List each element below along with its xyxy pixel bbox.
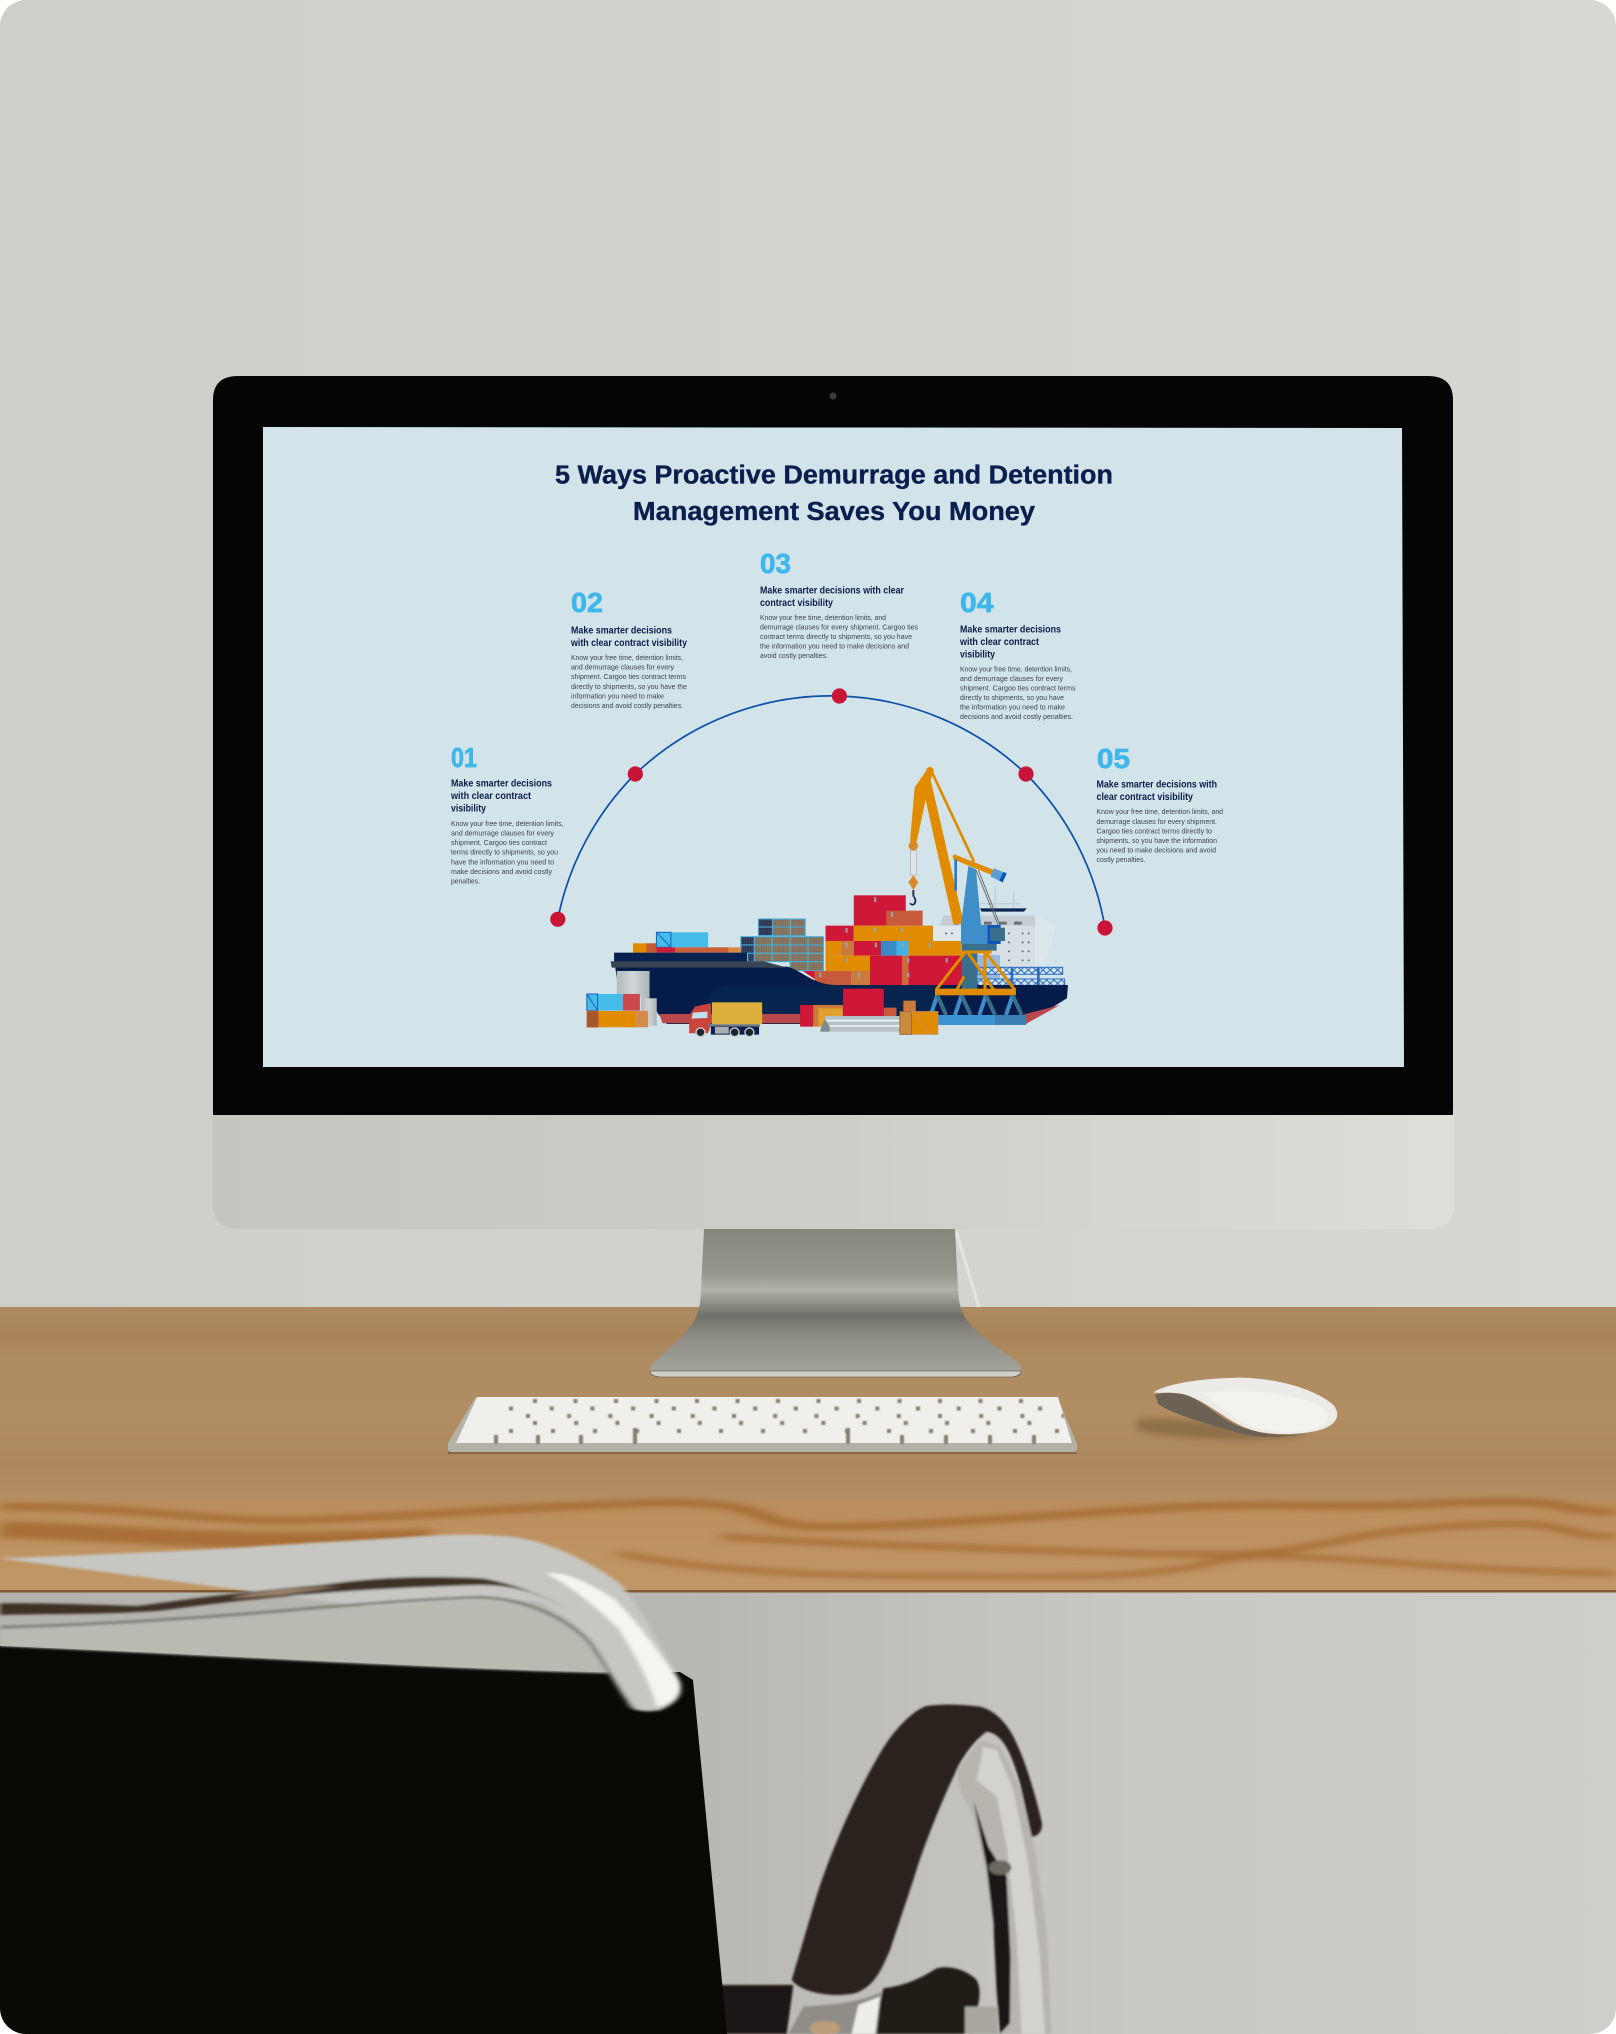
container stack <box>803 895 962 985</box>
text block 04: Know your free time, detention limits, <box>960 666 1072 674</box>
text block 05: costly penalties. <box>1096 856 1146 864</box>
ground cargo and truck <box>587 971 938 1037</box>
keyboard shadow <box>448 1451 1077 1454</box>
tube body <box>0 1535 681 1711</box>
text block 01: Know your free time, detention limits, <box>451 820 563 828</box>
text block 05: Know your free time, detention limits, and <box>1096 808 1223 816</box>
text block 04: and demurrage clauses for every <box>960 675 1063 683</box>
text block 02: with clear contract visibility <box>570 638 687 649</box>
text block 01: terms directly to shipments, so you <box>451 849 558 857</box>
tube dark reflection <box>0 1577 565 1615</box>
left deck containers <box>633 932 741 953</box>
black bezel <box>213 376 1453 1115</box>
text block 05: you need to make decisions and avoid <box>1096 846 1216 854</box>
text block 05: 05 <box>1097 743 1130 774</box>
keyboard base <box>448 1398 1077 1452</box>
tube tan reflection <box>230 1587 340 1598</box>
text block 05: clear contract visibility <box>1096 792 1193 803</box>
text block 04: Make smarter decisions <box>960 624 1061 636</box>
webcam <box>830 392 836 400</box>
hub wedge <box>873 1967 980 2034</box>
text block 05: shipments, so you have the information <box>1096 837 1217 845</box>
arc markers <box>550 688 1113 936</box>
text block 03: Make smarter decisions with clear <box>760 586 904 596</box>
monitor stand <box>650 1229 1022 1377</box>
arc timeline <box>558 696 1105 928</box>
text block 05 <box>1096 743 1223 864</box>
text block 04: visibility <box>960 650 995 660</box>
title <box>555 462 1113 526</box>
text block 02: shipment. Cargoo ties contract terms <box>571 673 686 681</box>
mouse highlight <box>1202 1391 1328 1432</box>
text block 02: 02 <box>571 587 603 618</box>
title: 5 Ways Proactive Demurrage and Detention <box>555 462 1113 490</box>
keyboard <box>448 1397 1077 1454</box>
icon: truck <box>689 1002 762 1037</box>
text block 02 <box>570 587 687 710</box>
text block 01: have the information you need to <box>451 858 554 866</box>
text block 04 <box>959 587 1076 721</box>
gantry frame <box>929 952 1026 1025</box>
text block 05: Make smarter decisions with <box>1096 780 1217 790</box>
center cargo <box>800 989 938 1034</box>
text block 02: information you need to make <box>571 692 664 700</box>
screen background <box>263 427 1404 1067</box>
axle <box>965 2007 998 2034</box>
lower dark support <box>713 1985 793 2034</box>
crane <box>908 767 1026 1025</box>
text block 03: avoid costly penalties. <box>760 652 828 660</box>
chrome frame <box>0 1535 681 1711</box>
icon: power cable <box>956 1231 979 1307</box>
text block 02: directly to shipments, so you have the <box>571 683 687 691</box>
keys <box>456 1397 1072 1443</box>
ship hull <box>611 953 1068 1024</box>
screen panel <box>263 427 1404 1067</box>
text block 01: visibility <box>451 804 486 814</box>
wooden desk <box>0 1307 1616 1592</box>
text block 03: 03 <box>760 548 791 579</box>
text block 01: shipment. Cargoo ties contract <box>451 839 547 847</box>
text block 02: decisions and avoid costly penalties. <box>571 702 683 710</box>
rubber tyre <box>792 1705 1042 1995</box>
chrome rim <box>957 1740 1052 2034</box>
chrome post <box>788 1992 882 2034</box>
background: wall <box>0 0 1616 1320</box>
bolt <box>989 1860 1011 1875</box>
inner space below tube <box>0 1598 608 1673</box>
background: lower wall <box>0 1585 1616 2034</box>
stand body <box>650 1229 1022 1374</box>
text block 04: decisions and avoid costly penalties. <box>960 713 1073 721</box>
office chair <box>0 1535 1052 2034</box>
illustration: cargo ship and crane <box>587 767 1068 1037</box>
text block 01: penalties. <box>451 877 480 885</box>
mesh containers <box>741 919 823 971</box>
text block 01: and demurrage clauses for every <box>451 830 554 838</box>
title: Management Saves You Money <box>633 498 1036 526</box>
ship superstructure <box>933 887 1065 986</box>
text block 03: contract visibility <box>760 598 833 609</box>
stand foot edge <box>650 1371 1021 1377</box>
text block 01: make decisions and avoid costly <box>451 868 552 876</box>
text block 02: Make smarter decisions <box>571 626 672 636</box>
mouse underside <box>1155 1392 1307 1437</box>
tube thin line <box>0 1597 634 1708</box>
tube highlight <box>546 1573 680 1707</box>
text block 04: shipment. Cargoo ties contract terms <box>960 684 1076 692</box>
key gaps <box>496 1401 1070 1444</box>
text block 01: 01 <box>451 742 477 773</box>
left cargo pile <box>587 971 657 1027</box>
text block 01 <box>450 742 563 885</box>
text block 04: directly to shipments, so you have <box>960 694 1064 702</box>
post tan reflection <box>810 2021 840 2034</box>
text block 03: the information you need to make decisions and <box>760 643 909 651</box>
text block 05: demurrage clauses for every shipment. <box>1096 818 1217 826</box>
rim shadow <box>973 1800 1011 2034</box>
text block 03: demurrage clauses for every shipment. Cargoo ties <box>760 624 918 632</box>
mouse <box>1137 1378 1337 1440</box>
post highlight <box>852 1997 880 2034</box>
text block 04: 04 <box>960 587 994 618</box>
text block 02: and demurrage clauses for every <box>571 664 674 672</box>
text block 03 <box>760 548 918 660</box>
wheel and rim <box>713 1705 1052 2034</box>
text block 01: Make smarter decisions <box>451 778 552 790</box>
silver chin <box>213 1110 1454 1229</box>
text block 05: Cargoo ties contract terms directly to <box>1096 828 1212 836</box>
text block 04: the information you need to make <box>960 704 1065 712</box>
text block 03: Know your free time, detention limits, and <box>760 614 886 622</box>
ship and containers <box>611 895 1068 1024</box>
text block 04: with clear contract <box>959 637 1039 648</box>
mouse shadow <box>1137 1418 1310 1440</box>
monitor <box>213 376 1454 1229</box>
text block 01: with clear contract <box>450 791 531 802</box>
text block 02: Know your free time, detention limits, <box>571 654 683 662</box>
mouse shell <box>1153 1378 1337 1434</box>
ship railing <box>977 967 1065 986</box>
seat back panel <box>0 1646 727 2034</box>
text block 03: contract terms directly to shipments, so you have <box>760 633 912 641</box>
rim highlight <box>977 1747 1045 2034</box>
